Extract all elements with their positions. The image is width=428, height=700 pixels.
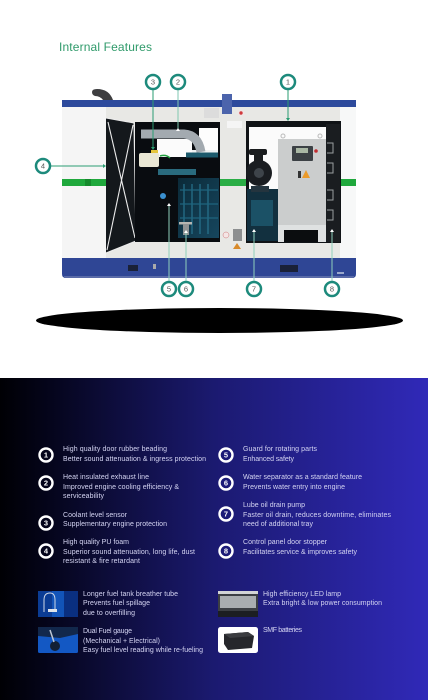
accessory: SMF battery (218, 627, 302, 653)
feature 3: Supplementary engine protection (63, 521, 167, 528)
feature 7: need of additional tray (243, 521, 314, 528)
callout 1 (281, 75, 295, 121)
feature 2: serviceability (63, 493, 104, 500)
feature 6: 6 (224, 478, 228, 488)
feature 7: Lube oil drain pump (243, 502, 305, 509)
accessory: LED lamp: Extra bright & low power consumption (263, 600, 382, 607)
feature 6: Water separator as a standard feature (243, 474, 362, 481)
left bay (135, 122, 220, 242)
feature 5: Enhanced safety (243, 456, 294, 463)
feature 1: Better sound attenuation & ingress protection (63, 456, 206, 463)
open door (106, 118, 136, 253)
accessory: LED lamp: High efficiency LED lamp (263, 591, 341, 598)
feature 8: Facilitates service & improves safety (243, 549, 358, 556)
callout 4 (36, 159, 106, 173)
callout 3: 3 (151, 78, 155, 86)
exhaust stub (92, 89, 113, 100)
feature 4: 4 (44, 546, 49, 556)
accessory: fuel gauge: (Mechanical + Electrical) (83, 638, 160, 645)
feature 2: Improved engine cooling efficiency & (63, 484, 179, 491)
feature 5: Guard for rotating parts (243, 446, 318, 453)
callout 8 (325, 229, 339, 296)
callout 8: 8 (330, 284, 334, 294)
callout 4: 4 (41, 162, 45, 170)
control panel (278, 139, 326, 225)
feature 2 (40, 474, 179, 500)
accessory: fuel gauge: Easy fuel level reading while re-fueling (83, 647, 203, 654)
accessory: breather tube: Longer fuel tank breather tube (83, 591, 178, 598)
feature 6: Prevents water entry into engine (243, 484, 345, 491)
accessory: breather tube: due to overfilling (83, 610, 135, 617)
feature 3: 3 (44, 518, 48, 528)
feature 2: Heat insulated exhaust line (63, 474, 149, 481)
feature 5 (220, 446, 318, 463)
feature 4: High quality PU foam (63, 539, 129, 546)
callout 5 (162, 203, 176, 296)
accessory: breather tube: Prevents fuel spillage (83, 600, 150, 607)
feature 6 (220, 474, 362, 491)
feature 1 (40, 446, 206, 463)
feature 2: 2 (44, 478, 48, 488)
feature 1: High quality door rubber beading (63, 446, 167, 453)
middle panel details (222, 94, 232, 114)
feature 1: 1 (44, 450, 48, 460)
title: Internal Features (59, 40, 152, 54)
shadow ellipse (36, 308, 403, 333)
feature 3 (40, 512, 167, 530)
accessory: LED lamp (218, 591, 382, 617)
accessory: SMF battery: SMF batteries (263, 627, 302, 634)
callout 5: 5 (167, 284, 171, 294)
callout 2 (171, 75, 185, 131)
feature 7: 7 (224, 510, 228, 518)
feature 3: Coolant level sensor (63, 512, 128, 519)
callout 7 (247, 229, 261, 296)
feature 4: resistant & fire retardant (63, 558, 140, 565)
callout 1: 1 (286, 78, 290, 86)
feature 5: 5 (224, 450, 228, 460)
callout 6 (179, 230, 193, 296)
accessory: breather tube (38, 591, 178, 617)
green stripes (62, 179, 106, 186)
feature 4 (40, 539, 195, 565)
feature 8 (220, 539, 358, 558)
roof band (62, 100, 356, 107)
generator illustration (62, 89, 356, 278)
right bay (246, 121, 341, 243)
callout 7: 7 (252, 284, 256, 294)
base frame (62, 258, 356, 278)
accessory: fuel gauge (38, 627, 203, 654)
feature 4: Superior sound attenuation, long life, dust (63, 549, 195, 556)
feature 7 (220, 502, 392, 528)
accessory: fuel gauge: Dual Fuel gauge (83, 628, 132, 635)
feature 7: Faster oil drain, reduces downtime, eliminates (243, 512, 392, 519)
feature 8: Control panel door stopper (243, 539, 328, 546)
feature 8: 8 (224, 546, 228, 556)
callout 2: 2 (176, 78, 180, 86)
dark feature panel (0, 378, 428, 700)
callout 6: 6 (184, 284, 188, 294)
callout 3 (146, 75, 160, 150)
